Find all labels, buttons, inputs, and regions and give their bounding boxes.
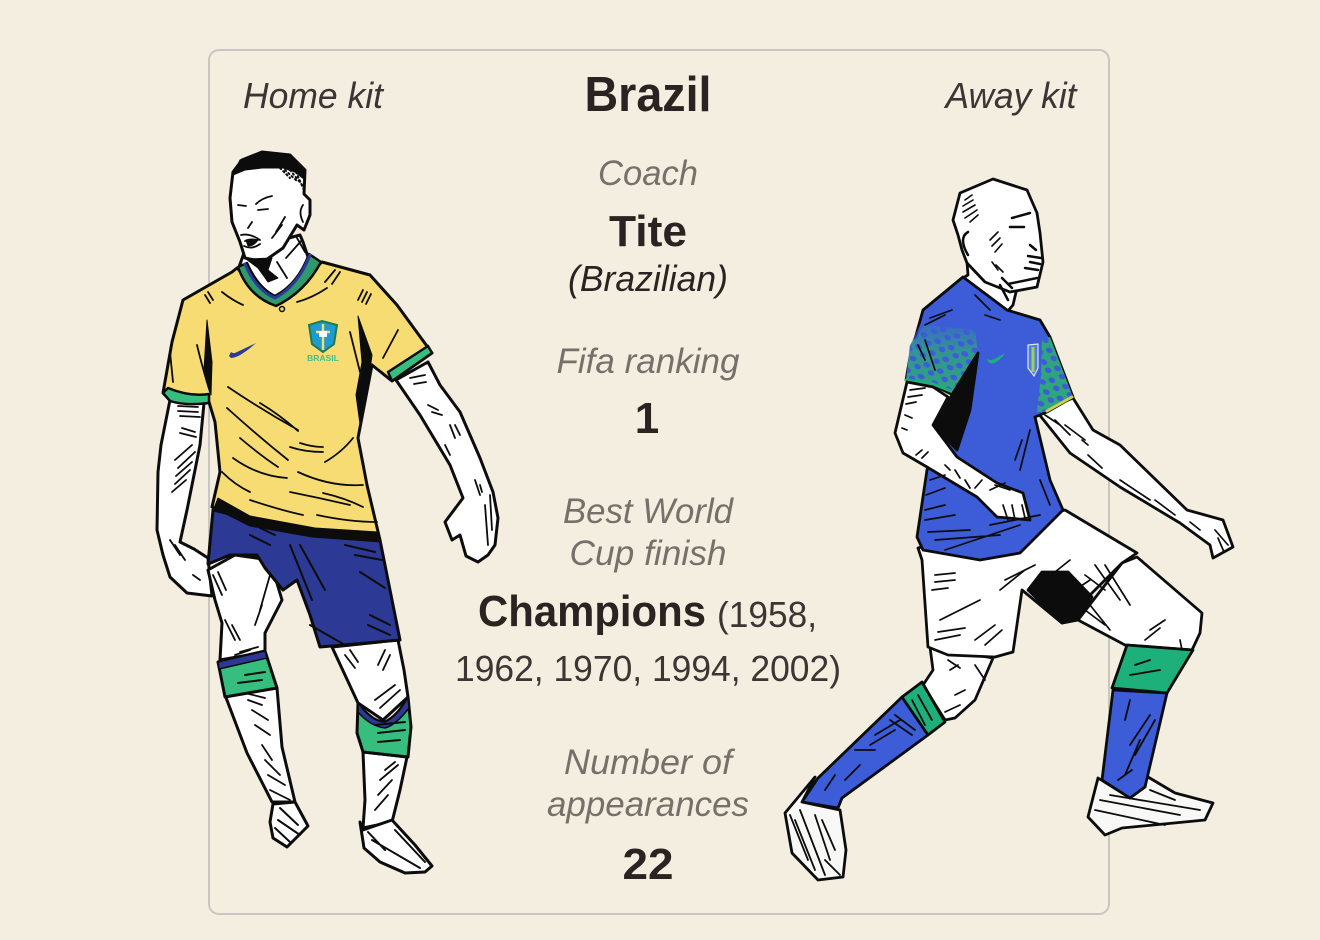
hem shadow — [214, 498, 381, 542]
panel: card frame — [209, 50, 1109, 914]
rear sock — [1102, 690, 1167, 798]
text block: Fifa ranking: Fifa ranking — [556, 342, 740, 381]
neck — [963, 262, 1017, 312]
shorts — [918, 510, 1137, 657]
sleeve cuff left — [163, 388, 209, 404]
text block: best World Cup finish — [455, 492, 841, 689]
text block: best World Cup finish: Champions — [478, 587, 706, 636]
front leg — [208, 555, 282, 660]
left flank shadow — [204, 320, 212, 395]
text block: best World Cup finish: Best World — [563, 492, 735, 531]
hatching: home kit shirt — [170, 262, 398, 522]
rear leg — [332, 640, 408, 720]
rear boot — [1088, 777, 1213, 835]
text block: coach: (Brazilian) — [568, 258, 728, 299]
collar navy edge — [245, 255, 310, 298]
rear thigh — [1078, 557, 1202, 650]
collar — [238, 254, 321, 306]
hatching: home kit shorts and socks — [238, 528, 425, 868]
text block: number of appearances: appearances — [547, 785, 749, 824]
neck — [238, 235, 318, 300]
sleeve cuff right — [1047, 397, 1072, 411]
near arm and hand — [895, 382, 1030, 520]
hatching: away kit shorts — [932, 560, 1182, 712]
text block: coach: Coach — [598, 154, 698, 193]
hatching: away kit limbs — [902, 388, 1228, 552]
text block: best World Cup finish: (1958, — [717, 594, 817, 635]
boot, rear — [360, 820, 432, 873]
illustration: home kit player — [157, 152, 498, 873]
illustration: away kit player — [785, 179, 1233, 880]
green sock band, rear — [357, 697, 411, 757]
shorts — [208, 510, 400, 647]
right arm and hand — [396, 362, 498, 562]
shirt — [163, 262, 432, 540]
sleeve cuff right — [388, 346, 432, 381]
icon: shirt button — [280, 306, 284, 312]
heading: Home kit: Home kit — [243, 75, 385, 116]
icon: swoosh away — [988, 354, 1004, 363]
head — [230, 152, 310, 262]
face details — [963, 213, 1041, 300]
rear sock — [363, 752, 407, 828]
text block: Fifa ranking: 1 — [635, 394, 659, 443]
icon: swoosh home — [229, 343, 256, 358]
text block: coach: Tite — [609, 207, 687, 256]
navy trim, front — [218, 651, 267, 669]
front boot — [785, 777, 846, 880]
green patterned sleeve left — [906, 325, 978, 393]
rear sock green band — [1112, 645, 1193, 693]
front sock — [225, 688, 295, 802]
far arm — [1038, 398, 1233, 558]
green patterned sleeve right — [1037, 337, 1073, 412]
front sock green band — [902, 682, 945, 735]
navy trim, rear — [358, 697, 409, 728]
sleeve pattern fade left — [906, 315, 985, 393]
hatching: away kit shirt — [918, 295, 1050, 550]
mouth and beard — [246, 239, 278, 282]
head — [953, 179, 1043, 292]
face details — [238, 196, 305, 258]
icon: crest home: BRASIL — [307, 353, 339, 363]
icon: crest home — [307, 321, 339, 363]
hatching: away kit socks and boots — [790, 660, 1200, 875]
left arm — [157, 400, 212, 596]
heading: Away kit: Away kit — [944, 75, 1078, 116]
text block: best World Cup finish: Cup finish — [570, 534, 726, 573]
text block: number of appearances — [547, 743, 749, 889]
title: Brazil — [584, 68, 712, 122]
front sock — [802, 697, 928, 808]
text block: number of appearances: Number of — [564, 743, 735, 782]
front thigh — [923, 647, 993, 720]
text block: Fifa ranking — [556, 342, 740, 443]
boot, front — [270, 802, 308, 847]
hair — [233, 152, 305, 180]
hatching: home kit limbs — [170, 375, 492, 810]
green sock band, front — [218, 651, 277, 697]
text block: number of appearances: 22 — [622, 840, 674, 889]
armpit shadow — [356, 316, 372, 424]
shirt — [906, 277, 1073, 560]
torso shadow — [935, 353, 978, 450]
hair fade — [280, 168, 304, 190]
hatching: away kit head — [963, 195, 1003, 272]
text block: coach — [568, 154, 728, 299]
icon: crest away — [1028, 344, 1038, 376]
sleeve cuff left — [906, 380, 953, 392]
crotch shadow — [1028, 572, 1092, 623]
text block: best World Cup finish: 1962, 1970, 1994, 2002) — [455, 648, 841, 689]
